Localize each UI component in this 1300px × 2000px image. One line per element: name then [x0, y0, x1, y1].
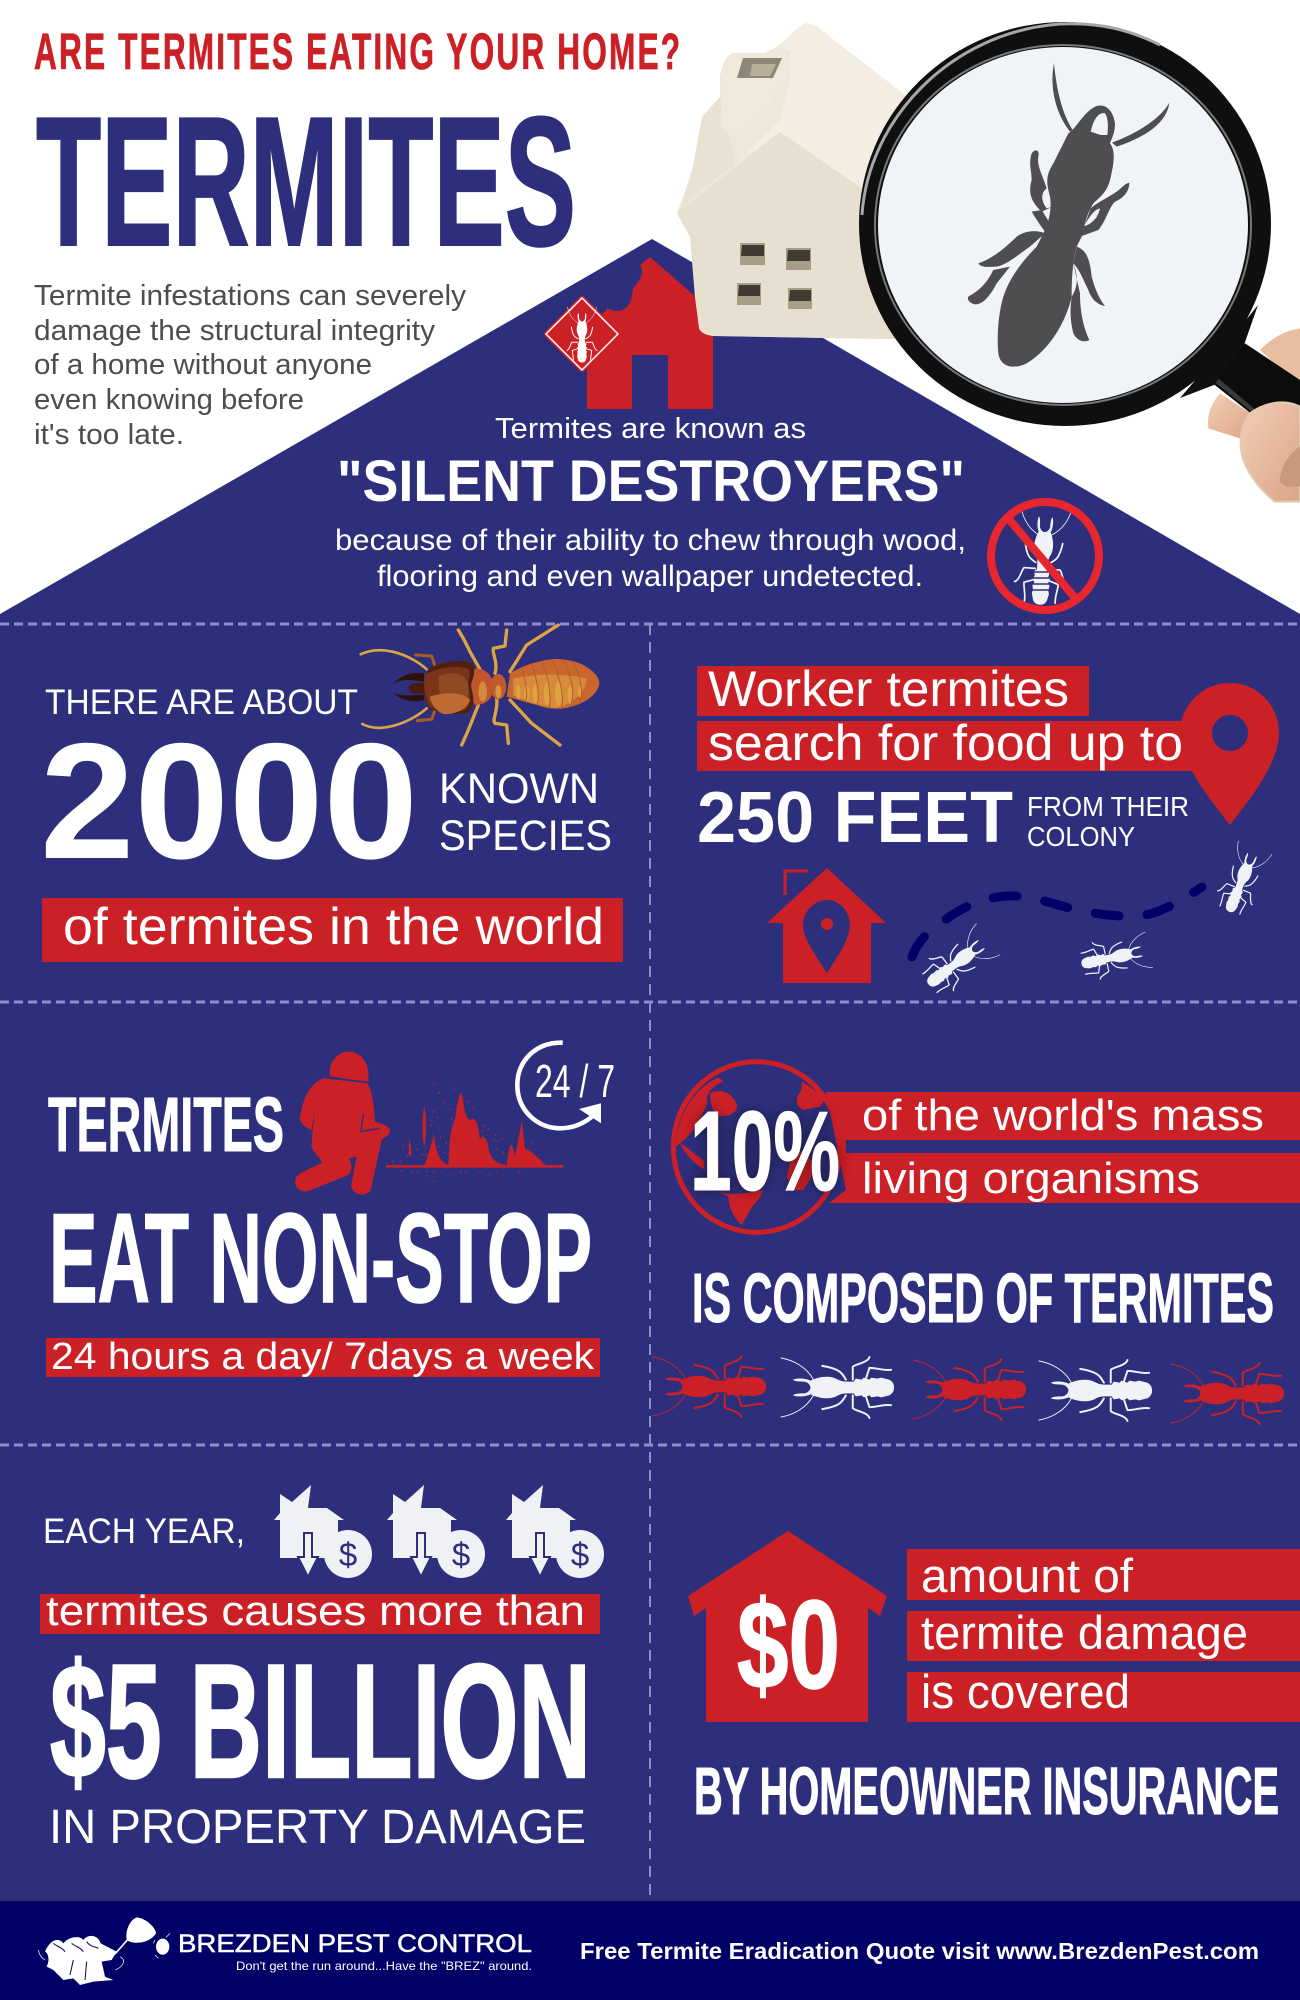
footer band: [0, 1901, 1300, 2000]
intro paragraph: it's too late.: [34, 419, 184, 451]
banners: amount of damage covered: amount of: [921, 1549, 1134, 1602]
footer call to action: Free Termite Eradication Quote visit www.BrezdenPest.com: [580, 1938, 1259, 1964]
intro paragraph: damage the structural integrity: [34, 315, 436, 347]
panel: 5 billion: [40, 1485, 604, 1854]
illustration: hand holding magnifier: [1208, 328, 1300, 502]
banners: amount of damage covered: is covered: [921, 1665, 1130, 1718]
icon: white termite 1: [916, 923, 1000, 1000]
text: known species: [439, 765, 612, 860]
icon: house value down 1: [274, 1485, 372, 1578]
banner: worker termites: [697, 661, 1194, 771]
intro paragraph: even knowing before: [34, 384, 304, 416]
banners: amount of damage covered: [907, 1549, 1300, 1722]
icon: termite warning diamond: [546, 298, 618, 370]
number: 250 feet: 250 FEET: [697, 778, 1013, 858]
logo mascots: [38, 1917, 170, 1985]
icon: house value down 3: [506, 1485, 604, 1578]
icon: red bitten house: [587, 257, 713, 409]
dashed dividers: [0, 624, 1300, 1897]
icon: kneeling person: [295, 1052, 390, 1195]
icon: globe: [673, 1062, 840, 1232]
icon row: termites: [653, 1356, 1284, 1424]
panel: 2000 known species: [40, 625, 623, 962]
icon: house value down 1: $: [339, 1536, 357, 1573]
intro paragraph: of a home without anyone: [34, 349, 372, 381]
icon: red house with pin: [767, 868, 886, 983]
logo tagline: Don't get the run around...Have the "BREZ" around.: [236, 1959, 532, 1973]
banners: amount of damage covered: termite damage: [921, 1606, 1248, 1659]
banner: of termites in the world: of termites in the world: [63, 898, 604, 956]
text: in property damage: IN PROPERTY DAMAGE: [49, 1801, 586, 1854]
text: there are about: THERE ARE ABOUT: [45, 683, 358, 722]
text: from their colony: COLONY: [1027, 821, 1135, 852]
number: 10%: 10%: [690, 1088, 840, 1214]
illustration: magnifying glass with termite silhouette: [859, 22, 1271, 426]
icon: location pin: [1180, 683, 1279, 825]
banners: world's mass: living organisms: [862, 1154, 1200, 1203]
banner: 24 hours a day: 24 hours a day/ 7days a week: [51, 1336, 595, 1378]
panel: eat non-stop: [46, 1043, 615, 1378]
house windows: [737, 243, 812, 309]
silent destroyers text block: flooring and even wallpaper undetected.: [377, 560, 923, 593]
silent destroyers text block: Termites are known as: [495, 413, 806, 445]
banners: world's mass: [826, 1091, 1300, 1203]
banner: worker termites: Worker termites: [708, 661, 1069, 717]
panel: ten percent: [653, 1062, 1300, 1424]
illustration: ceramic house photo: [677, 23, 905, 339]
logo wordmark: BREZDEN PEST CONTROL: [178, 1930, 532, 1958]
icon: house value down 2: $: [452, 1536, 470, 1573]
text: termites: TERMITES: [48, 1082, 284, 1168]
icon: red house with zero dollars: [688, 1531, 887, 1722]
icon: no termites sign: [991, 502, 1099, 610]
intro paragraph: Termite infestations can severely: [34, 280, 467, 312]
icon: red house with zero dollars: $0: [737, 1576, 840, 1715]
route dashed path: [912, 887, 1202, 957]
banners: world's mass: of the world's mass: [862, 1091, 1264, 1140]
icon: 24/7 clock arrow: 24 / 7: [535, 1055, 615, 1107]
termite silhouette: [968, 63, 1169, 367]
icon: house value down 3: $: [571, 1536, 589, 1573]
panel: 250 feet: [697, 661, 1279, 1000]
text: from their colony: [1027, 791, 1189, 852]
main title: TERMITES: [36, 78, 576, 284]
silent destroyers text block: "SILENT DESTROYERS": [337, 449, 965, 514]
intro paragraph: [34, 280, 467, 451]
banner: worker termites: search for food up to: [708, 715, 1183, 771]
silent destroyers text block: because of their ability to chew through wood,: [335, 524, 966, 557]
silent destroyers text block: [335, 413, 966, 593]
text: from their colony: FROM THEIR: [1027, 791, 1189, 822]
icon: house value down 2: [387, 1485, 485, 1578]
heading: eat non-stop: EAT NON-STOP: [49, 1187, 592, 1329]
icon: 24/7 clock arrow: [517, 1043, 615, 1128]
illustration: wood dust pile: [386, 1083, 563, 1182]
icon: brown termite: [361, 625, 599, 745]
subtitle question: ARE TERMITES EATING YOUR HOME?: [34, 23, 680, 80]
number: 2000: 2000: [40, 709, 418, 893]
icon: white termite 2: [1078, 932, 1153, 982]
panel: homeowner insurance: [688, 1531, 1300, 1829]
text: known species: KNOWN: [439, 765, 599, 813]
banner: termites causes more than: termites causes more than: [46, 1587, 585, 1634]
number: 5 billion: $5 BILLION: [50, 1631, 591, 1812]
icon: white termite 3: [1212, 841, 1272, 919]
text: known species: SPECIES: [439, 812, 612, 860]
text: each year: EACH YEAR,: [43, 1512, 245, 1551]
